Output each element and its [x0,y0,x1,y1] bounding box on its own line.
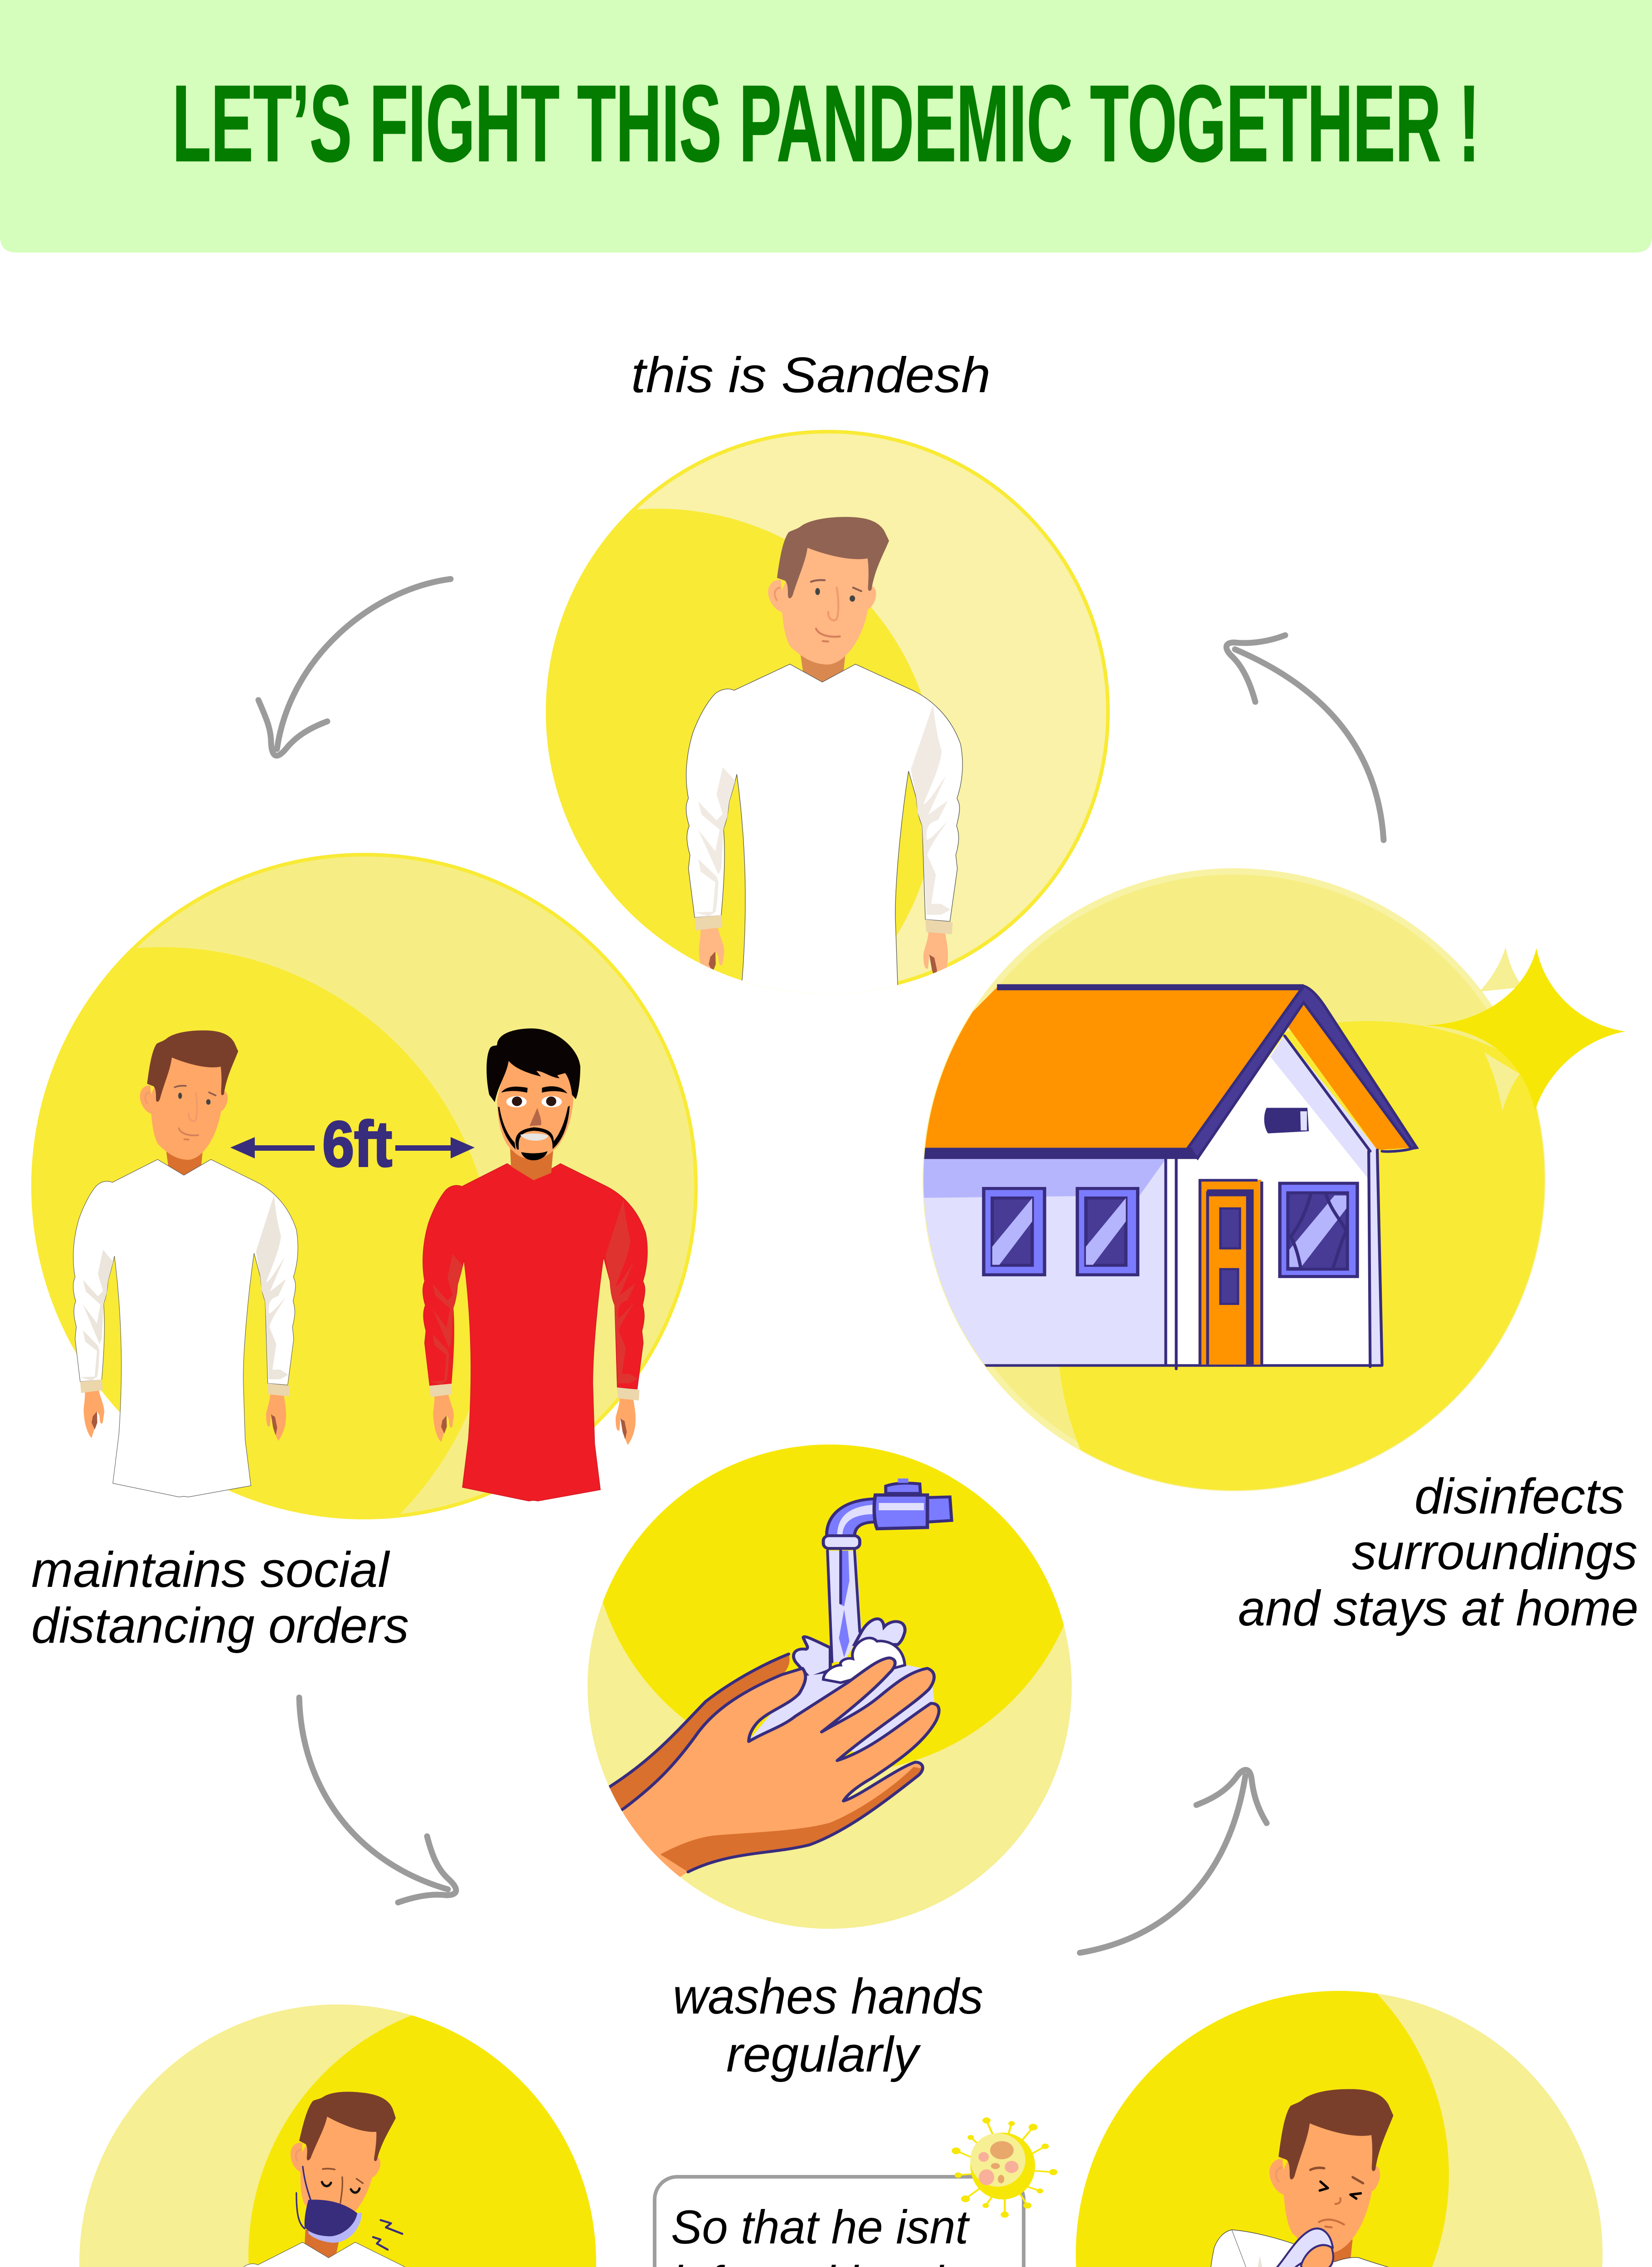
panel: coughing into elbow [922,1911,1603,2267]
figure: Sandesh [685,517,963,994]
callout: so that he isnt infected [655,2177,1024,2267]
figure: Sandesh at distance [73,1031,298,1497]
figure: man in red [423,1028,647,1501]
arrow: right to top [1226,635,1384,840]
caption: washes hands regularly [673,1969,983,2082]
arrow: centre to right [1080,1770,1267,1953]
water stream [827,1551,861,1662]
caption: maintains social distancing orders: distancing orders [31,1598,409,1654]
tap [826,1499,875,1538]
caption: maintains social distancing orders [31,1542,409,1654]
figure: man coughing [1199,2089,1446,2267]
arrow: left to centre [299,1698,456,1902]
front wall [1166,1035,1383,1365]
arrow: top to left [258,579,451,756]
panel: hand washing [588,1279,1085,1929]
caption: this is Sandesh: this is Sandesh [631,347,991,403]
caption: washes hands regularly: washes hands [673,1969,983,2024]
arrow: right [395,1137,475,1158]
windows [984,1183,1357,1276]
icon: sparkle [1425,947,1625,1111]
panel: wearing a mask [79,1997,765,2267]
shirt [1199,2230,1446,2267]
caption: disinfects surroundings and stays at home [1238,1469,1638,1636]
caption: disinfects surroundings and stays at home: and stays at home [1238,1581,1638,1636]
caption: maintains social distancing orders: maintains social [31,1542,390,1598]
door [1199,1180,1261,1365]
callout: so that he isnt infected: So that he isnt [671,2201,970,2254]
side wall [907,1159,1166,1365]
roof [907,987,1303,1148]
panel: Sandesh portrait [546,430,1110,994]
distance marker: 6ft [230,1108,475,1180]
arrow: left [230,1137,315,1158]
panel: social distancing [31,853,698,1519]
illustration: tap and hands [601,1479,952,1889]
hands [601,1658,939,1889]
panel: house [907,871,1652,1642]
vent [1264,1108,1309,1134]
caption: disinfects surroundings and stays at home: surroundings [1352,1524,1637,1580]
header banner [0,0,1652,253]
illustration: house [907,984,1417,1369]
caption: disinfects surroundings and stays at home: disinfects [1414,1469,1624,1524]
distance marker: 6ft: 6ft [322,1108,392,1180]
caption: washes hands regularly: regularly [726,2027,921,2082]
soap foam [855,1619,905,1644]
icon: virus [952,2117,1057,2218]
figure: man with mask [219,2085,441,2267]
